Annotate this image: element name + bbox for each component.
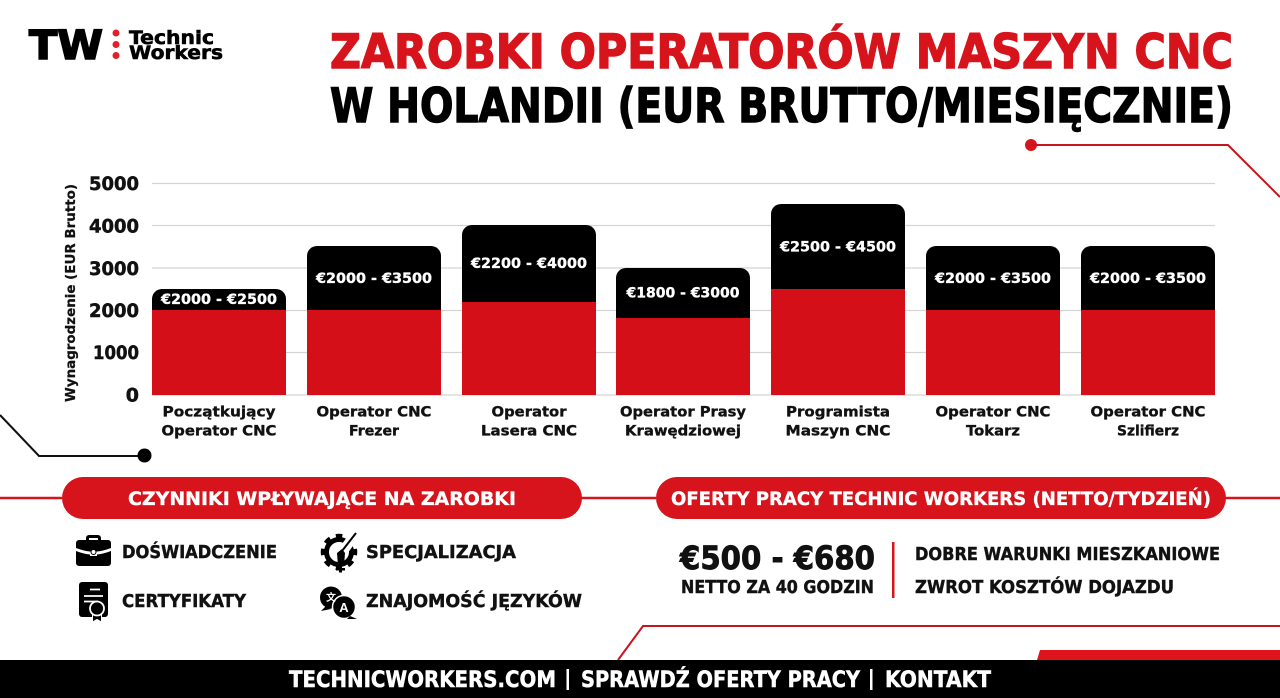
logo: Technic Workers xyxy=(29,23,223,69)
factor: doświadczenie: DOŚWIADCZENIE xyxy=(122,541,277,563)
benefits xyxy=(915,545,1220,598)
benefits: ZWROT KOSZTÓW DOJAZDU xyxy=(915,576,1174,598)
footer bar: TECHNICWORKERS.COM xyxy=(289,668,556,693)
bar: Operator Lasera CNC: Lasera CNC xyxy=(481,424,577,440)
y axis labels: 1000 xyxy=(93,342,139,364)
heading pill: factors: CZYNNIKI WPŁYWAJĄCE NA ZAROBKI xyxy=(128,488,516,510)
y axis labels xyxy=(89,173,139,406)
bar: Programista Maszyn CNC: Maszyn CNC xyxy=(786,424,890,440)
pay range xyxy=(679,539,875,598)
bar: Operator CNC Frezer xyxy=(307,246,441,440)
title xyxy=(330,25,1233,134)
divider xyxy=(892,542,894,598)
bar: Operator Prasy Krawędziowej: €1800 - €3000 xyxy=(626,286,740,302)
decorative connector: left black line xyxy=(0,415,152,462)
bar: Operator CNC Szlifierz: Szlifierz xyxy=(1117,424,1179,440)
bar: Początkujący Operator CNC xyxy=(152,289,286,440)
icon: briefcase xyxy=(76,535,111,566)
y axis labels: 0 xyxy=(126,384,139,406)
factor: certyfikaty xyxy=(79,582,246,622)
logo: Technic Workers: Technic xyxy=(129,27,214,49)
bar: Operator CNC Szlifierz xyxy=(1081,246,1215,440)
bar: Programista Maszyn CNC xyxy=(771,204,905,440)
decorative connector: top right red line xyxy=(1025,139,1280,197)
bar: Początkujący Operator CNC: €2000 - €2500 xyxy=(160,292,277,308)
factor: specjalizacja: SPECJALIZACJA xyxy=(366,543,516,563)
decorative red band behind pills xyxy=(0,497,1280,499)
bar: Operator CNC Tokarz xyxy=(926,246,1060,440)
bar: Początkujący Operator CNC: Początkujący xyxy=(162,404,276,420)
bar: Operator CNC Frezer: Frezer xyxy=(349,424,400,440)
factor: znajomość języków xyxy=(320,586,582,619)
factor: certyfikaty: CERTYFIKATY xyxy=(122,592,246,612)
bar: Operator CNC Tokarz: Operator CNC xyxy=(936,404,1050,420)
footer bar: KONTAKT xyxy=(885,668,991,693)
bar: Operator Prasy Krawędziowej: Krawędziowej xyxy=(625,424,741,440)
bar: Operator Prasy Krawędziowej xyxy=(616,268,750,440)
benefits: DOBRE WARUNKI MIESZKANIOWE xyxy=(915,545,1220,565)
y axis title: Wynagrodzenie (EUR Brutto) xyxy=(63,184,79,402)
bar: Operator Lasera CNC: Operator xyxy=(492,404,567,420)
icon: translation bubbles: A xyxy=(339,600,349,615)
factor: znajomość języków: ZNAJOMOŚĆ JĘZYKÓW xyxy=(366,590,582,612)
heading pill: job offers: OFERTY PRACY TECHNIC WORKERS (NETTO/TYDZIEŃ) xyxy=(671,487,1211,510)
bar: Operator Lasera CNC xyxy=(462,225,596,440)
pay range: NETTO ZA 40 GODZIN xyxy=(681,578,874,598)
pay range: €500 - €680 xyxy=(679,539,875,577)
bar: Operator CNC Tokarz: €2000 - €3500 xyxy=(934,271,1051,287)
bar: Operator CNC Szlifierz: €2000 - €3500 xyxy=(1089,271,1206,287)
heading pill: job offers xyxy=(656,477,1226,519)
bar: Programista Maszyn CNC: Programista xyxy=(786,404,890,420)
y axis labels: 4000 xyxy=(89,216,139,238)
bar: Operator Lasera CNC: €2200 - €4000 xyxy=(470,256,587,272)
factor: doświadczenie xyxy=(76,535,277,566)
y axis labels: 2000 xyxy=(89,300,139,322)
icon: translation bubbles: 文 xyxy=(326,591,336,604)
heading pill: factors xyxy=(62,477,582,519)
chart gridlines xyxy=(152,184,1215,395)
footer bar: SPRAWDŹ OFERTY PRACY xyxy=(581,667,861,693)
bar chart: salaries xyxy=(63,173,1215,440)
bar: Operator Prasy Krawędziowej: Operator Prasy xyxy=(620,404,747,420)
bar: Operator CNC Szlifierz: Operator CNC xyxy=(1090,404,1206,420)
bar: Operator CNC Tokarz: Tokarz xyxy=(966,424,1020,440)
logo: Technic Workers: Workers xyxy=(129,42,223,64)
footer bar xyxy=(0,660,1280,698)
decorative red line above footer xyxy=(618,626,1280,660)
bar: Operator CNC Frezer: Operator CNC xyxy=(316,404,432,420)
factor: specjalizacja xyxy=(323,532,516,572)
icon: translation bubbles xyxy=(320,586,357,619)
decorative red block above footer xyxy=(1037,650,1280,660)
bar: Programista Maszyn CNC: €2500 - €4500 xyxy=(779,240,896,256)
bar: Operator CNC Frezer: €2000 - €3500 xyxy=(315,271,432,287)
logo: Technic Workers: TW xyxy=(29,23,103,69)
icon: gear and tool xyxy=(323,532,357,572)
y axis labels: 3000 xyxy=(89,258,139,280)
icon: certificate xyxy=(79,582,108,622)
bar: Początkujący Operator CNC: Operator CNC xyxy=(162,424,276,440)
y axis labels: 5000 xyxy=(89,173,139,195)
